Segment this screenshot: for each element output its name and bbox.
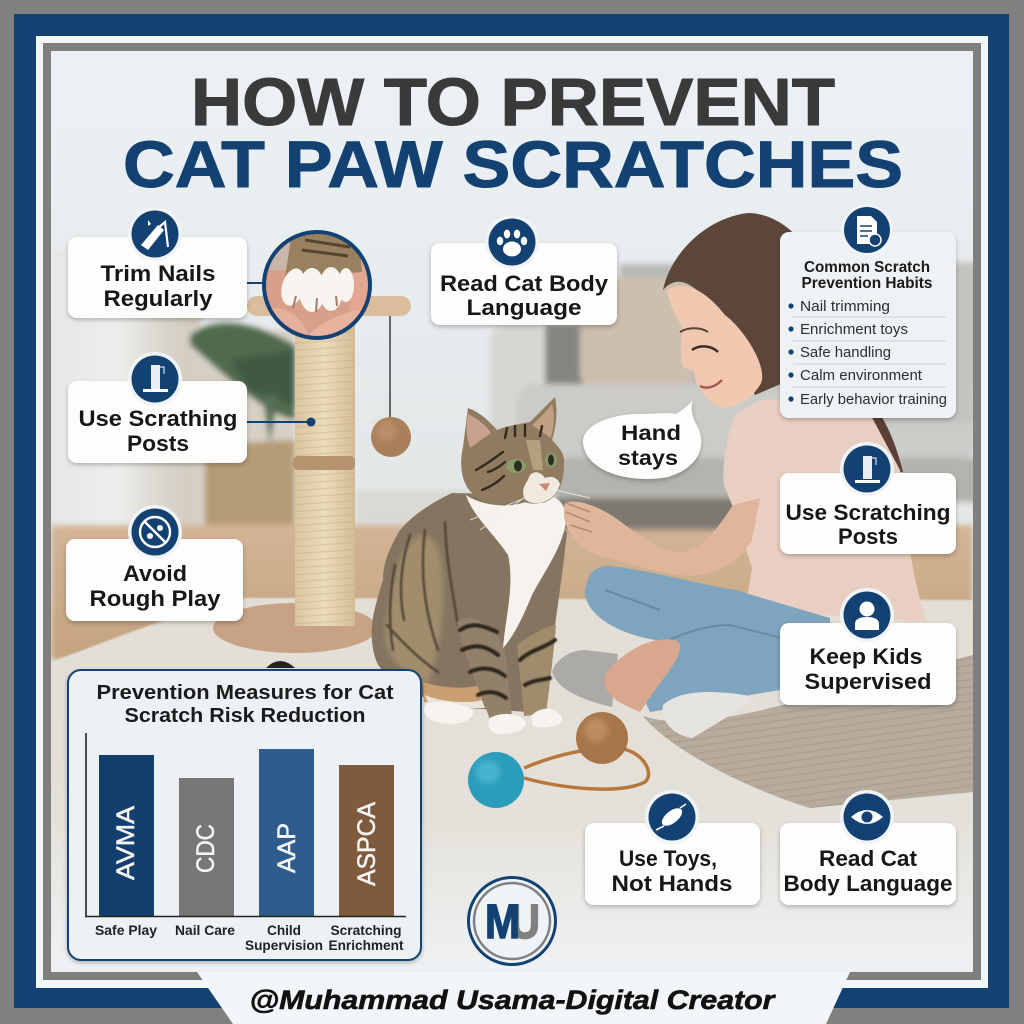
scratching post (213, 296, 411, 668)
pillow (643, 655, 973, 808)
card: read cat body language lower: Body Language (784, 871, 952, 896)
bar chart: CDC (192, 824, 220, 873)
connector lines (247, 283, 316, 426)
bar chart: AVMA (112, 806, 140, 880)
icon: no rough play (140, 517, 170, 547)
title (123, 65, 903, 201)
icon: checklist (857, 216, 881, 246)
paw close-up (262, 230, 375, 345)
card: use scrathing posts: Posts (127, 431, 189, 456)
icon: post (143, 365, 168, 392)
cat paws (424, 702, 562, 734)
card: keep kids supervised: Supervised (804, 669, 932, 694)
bar chart: Child (267, 922, 301, 938)
cat head (461, 397, 564, 504)
logo: U (510, 896, 540, 949)
speech bubble: hand stays: stays (618, 447, 678, 470)
chart panel: prevention measures (68, 670, 421, 960)
title: CAT PAW SCRATCHES (123, 127, 903, 201)
bar chart: Enrichment (328, 937, 404, 953)
icon: child (855, 602, 879, 630)
cat front legs (457, 618, 556, 720)
card: read cat body language lower: Read Cat (819, 846, 918, 871)
bar chart (85, 733, 406, 953)
bar chart: Nail Care (175, 922, 235, 938)
bar chart: AAP (273, 823, 301, 873)
card: use scrathing posts: Use Scrathing (78, 406, 238, 431)
bar chart: ASPCA (353, 802, 381, 886)
chart title: Scratch Risk Reduction (124, 705, 366, 727)
card: avoid rough play: Avoid (123, 561, 187, 586)
card: use toys: Not Hands (612, 871, 732, 896)
card: avoid rough play (66, 505, 243, 621)
rug (51, 598, 973, 972)
habit list: Enrichment toys (800, 322, 908, 338)
icon: nail clippers (141, 220, 168, 250)
card: read cat body language (431, 215, 617, 325)
card: keep kids supervised (780, 588, 956, 705)
card: use scratching posts: Use Scratching (786, 500, 950, 525)
icon: scratching post (855, 456, 880, 483)
habit list: Safe handling (800, 345, 891, 361)
card: common scratch prevention habits: Common Scratch (804, 259, 930, 276)
card: read cat body language lower (780, 790, 956, 905)
chart title: Prevention Measures for Cat (96, 682, 394, 704)
hand on ankle (604, 639, 680, 712)
speech bubble: hand stays (583, 401, 701, 479)
footer tab: @Muhammad Usama-Digital Creator (250, 985, 776, 1015)
card: use scratching posts: Posts (838, 524, 898, 549)
card: common scratch prevention habits: Prevention Habits (802, 275, 932, 292)
bar chart: Scratching (330, 922, 402, 938)
card: keep kids supervised: Keep Kids (810, 644, 922, 669)
title: HOW TO PREVENT (191, 65, 835, 140)
logo: M (485, 896, 520, 949)
illustrated cat (372, 397, 590, 734)
card: trim nails (68, 207, 247, 318)
card: common scratch prevention habits (780, 204, 956, 418)
habit list: Nail trimming (800, 299, 890, 315)
bar chart: Safe Play (95, 922, 157, 938)
chart title (96, 682, 394, 727)
icon: toy mouse (656, 804, 686, 830)
icon: paw (497, 230, 527, 256)
habit list: Early behavior training (800, 392, 947, 408)
card: avoid rough play: Rough Play (90, 586, 221, 611)
card: read cat body language: Read Cat Body (440, 271, 609, 296)
logo (468, 878, 556, 964)
bar chart: Supervision (245, 937, 323, 953)
card: use toys: Use Toys, (619, 846, 717, 871)
illustrated girl (552, 213, 973, 808)
habit list: Calm environment (800, 368, 922, 384)
card: use scratching posts (780, 442, 956, 554)
toys (468, 712, 649, 808)
habit list (788, 299, 947, 408)
speech bubble: hand stays: Hand (621, 422, 681, 445)
cat white chest (466, 495, 566, 648)
card: use toys (585, 790, 760, 905)
card: trim nails: Regularly (104, 286, 213, 311)
icon: eye (851, 810, 883, 824)
card: read cat body language: Language (466, 295, 582, 320)
footer tab (197, 972, 850, 1024)
card: use scrathing posts (68, 352, 247, 463)
card: trim nails: Trim Nails (100, 261, 216, 286)
cat body (372, 493, 567, 713)
